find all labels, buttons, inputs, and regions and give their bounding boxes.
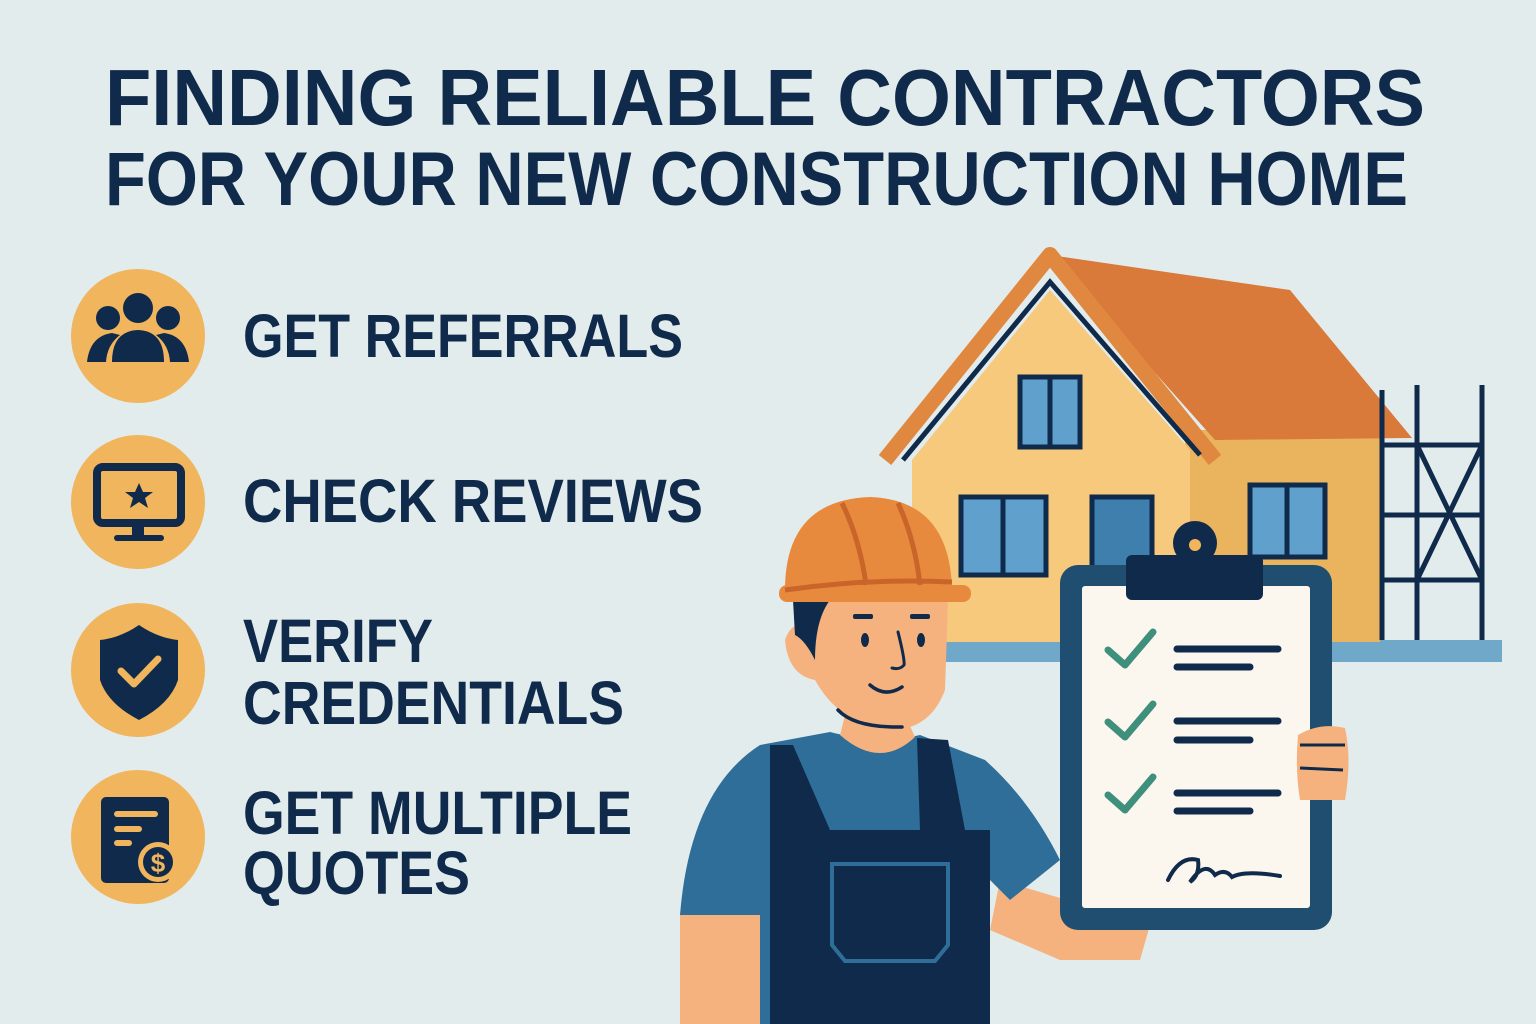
list item: verify credentials: CREDENTIALS: [243, 669, 624, 737]
illustration: house under construction: [885, 255, 1502, 662]
list item: get multiple quotes: QUOTES: [243, 839, 470, 907]
list item: verify credentials: [71, 603, 624, 737]
icon: people: [71, 269, 205, 403]
icon: quote document: $: [151, 848, 166, 878]
helmet: [785, 497, 952, 590]
illustration: worker holding clipboard: [680, 497, 1348, 1024]
hand: [1297, 726, 1348, 800]
neck: [840, 715, 915, 753]
windows: [961, 377, 1325, 587]
icon: quote document: [71, 770, 205, 904]
title: [105, 53, 1425, 222]
icon: shield check: [71, 603, 205, 737]
list item: verify credentials: VERIFY: [243, 607, 433, 675]
shirt: [680, 732, 1060, 1024]
icon: monitor with star: [71, 435, 205, 569]
clipboard: [1060, 521, 1332, 930]
list item: get referrals: GET REFERRALS: [243, 302, 683, 370]
scaffolding: [1382, 385, 1482, 640]
title: FINDING RELIABLE CONTRACTORS: [105, 53, 1425, 142]
overalls: [770, 738, 990, 1024]
arm: [990, 880, 1150, 960]
list item: get multiple quotes: GET MULTIPLE: [243, 779, 632, 847]
list item: get multiple quotes: [71, 770, 632, 907]
list item: check reviews: [71, 435, 703, 569]
list item: check reviews: CHECK REVIEWS: [243, 467, 703, 535]
head: [785, 600, 948, 730]
list item: get referrals: [71, 269, 683, 403]
